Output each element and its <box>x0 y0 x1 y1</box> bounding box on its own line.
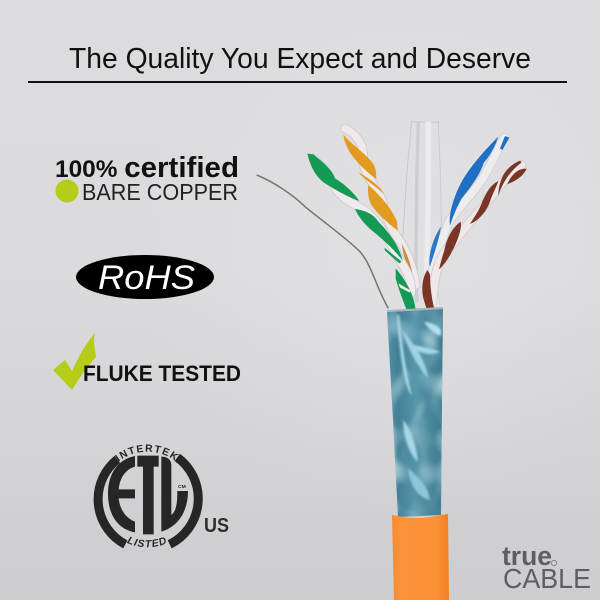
foil shield <box>385 305 445 520</box>
wires and film in 3x coordinates <box>257 120 527 310</box>
clear film <box>385 120 447 308</box>
badge: Fluke tested <box>53 333 241 390</box>
icon: green dot <box>56 180 78 202</box>
CM mark: CM <box>178 484 186 490</box>
T mark <box>137 456 159 534</box>
pair: brown and white <box>422 161 527 309</box>
icon: registered mark <box>551 560 557 566</box>
US mark: US <box>204 515 229 537</box>
pair: green and white <box>307 154 416 310</box>
badge: 100% certified bare copper: 100% certified <box>55 152 239 184</box>
pair: orange and white <box>343 128 416 285</box>
title: The Quality You Expect and Deserve <box>69 43 531 75</box>
badge: ETL Intertek listed logo: INTERTEK <box>114 444 179 462</box>
title underline <box>28 81 567 83</box>
drain wire <box>257 175 388 308</box>
logo: trueCABLE: true <box>502 541 552 571</box>
badge: ETL Intertek listed logo: LISTED <box>126 536 166 548</box>
badge: 100% certified bare copper: BARE COPPER <box>82 179 238 205</box>
badge: Fluke tested: FLUKE TESTED <box>83 361 241 386</box>
badge: 100% certified bare copper <box>55 152 239 205</box>
badge: ETL Intertek listed logo <box>94 444 203 548</box>
logo: trueCABLE <box>502 541 591 594</box>
logo: trueCABLE: CABLE <box>503 563 591 594</box>
badge: RoHS <box>76 255 214 299</box>
L mark <box>161 457 188 532</box>
orange outer jacket <box>392 514 449 600</box>
E mark <box>108 456 135 532</box>
pair: blue and white <box>428 136 509 306</box>
icon: green check mark <box>53 333 96 390</box>
cable photo <box>257 120 527 600</box>
badge: RoHS: RoHS <box>98 259 195 297</box>
